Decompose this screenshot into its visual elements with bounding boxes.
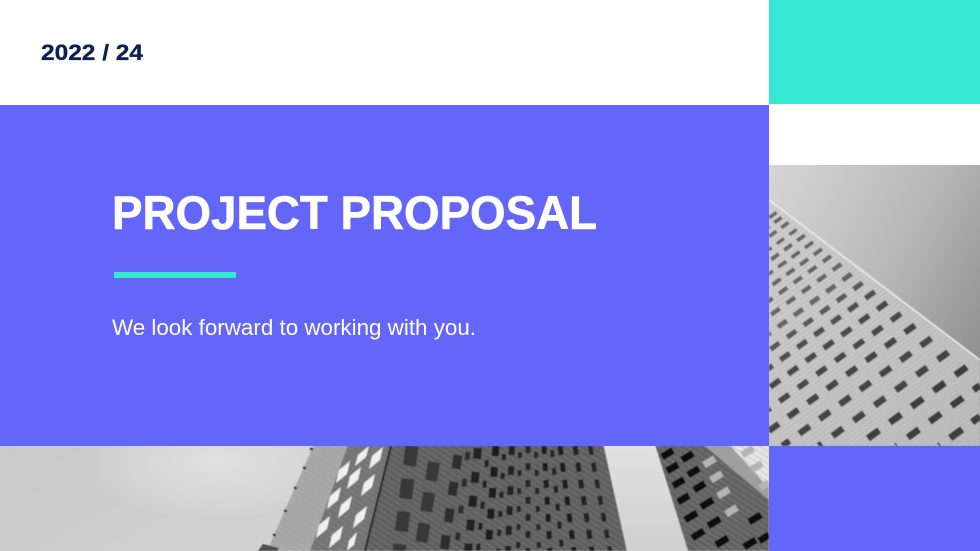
- right tower: [654, 442, 769, 551]
- accent divider: [114, 272, 236, 278]
- main facade: [365, 442, 627, 551]
- year label: 2022 / 24: [41, 40, 144, 65]
- left facade with diamond windows: [258, 442, 391, 551]
- photo: skyscrapers, bottom: [0, 446, 769, 551]
- subtitle: We look forward to working with you.: [112, 315, 476, 340]
- title: PROJECT PROPOSAL: [112, 186, 597, 239]
- panel: teal corner block: [769, 0, 980, 104]
- panel: purple title block: [0, 105, 769, 446]
- sky gap between towers: [603, 442, 688, 551]
- panel: purple corner block: [769, 446, 980, 551]
- photo: building corner, right: [769, 165, 980, 446]
